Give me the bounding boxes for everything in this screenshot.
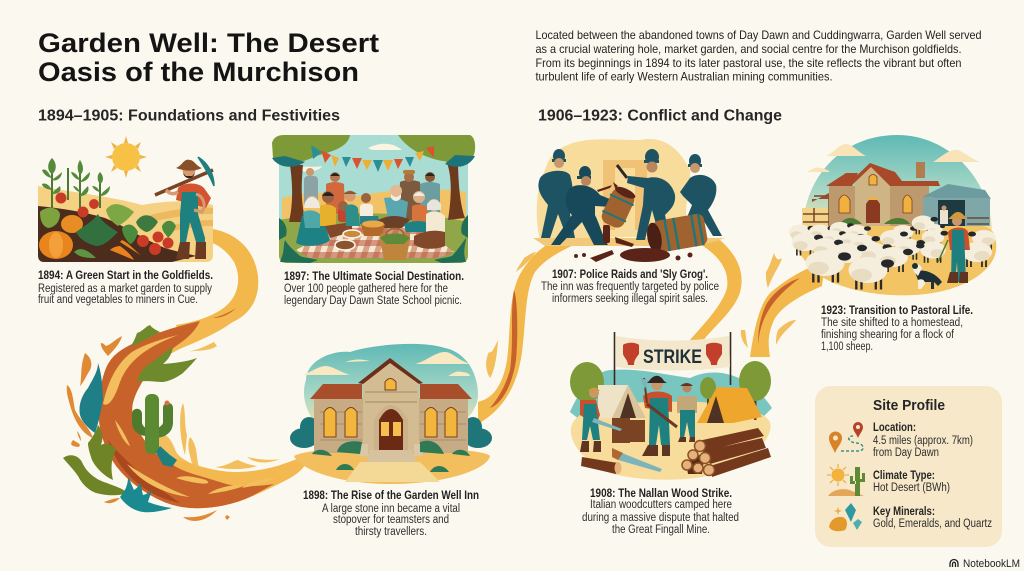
front-row figures (296, 185, 445, 249)
woodcutter right (677, 383, 697, 442)
blanket (296, 226, 454, 258)
strike banner (616, 336, 730, 370)
intro paragraph: as a crucial watering hole, market garden, and social centre for the Murchison goldfields. (536, 42, 962, 56)
swirl orange body (98, 321, 274, 508)
roof (310, 384, 472, 399)
caption: 1894: fruit and vegetables to miners in Cue. (38, 294, 198, 306)
caption: 1898: 1898: The Rise of the Garden Well Inn (303, 490, 479, 502)
title: Garden Well: The Desert (38, 28, 379, 58)
caption: 1908 (582, 488, 739, 536)
shrubs (312, 441, 470, 472)
homestead scene (789, 135, 996, 295)
river: police to strike (690, 240, 742, 342)
winding river timeline (63, 228, 825, 521)
flock of sheep (789, 216, 996, 290)
caption: 1923: The site shifted to a homestead, (821, 317, 963, 329)
logo: NotebookLM: NotebookLM (963, 558, 1020, 570)
icon: sun (105, 136, 147, 178)
caption: 1898: A large stone inn became a vital (322, 503, 460, 515)
icon: cactus (132, 394, 177, 467)
clouds (302, 352, 470, 376)
caption: 1907: The inn was frequently targeted by police (541, 281, 719, 293)
climate text: Hot Desert (BWh) (873, 482, 950, 494)
bushes (290, 428, 318, 448)
caption: 1908: during a massive dispute that halted (582, 512, 739, 524)
location text: 4.5 miles (approx. 7km) (873, 435, 973, 447)
trees (570, 361, 771, 420)
back-row figures (304, 168, 440, 220)
minerals text: Gold, Emeralds, and Quartz (873, 518, 992, 530)
caption: 1897: 1897: The Ultimate Social Destination. (284, 271, 464, 283)
officer 2 (551, 166, 612, 245)
icon: toppled barrel (645, 213, 708, 254)
trees (272, 135, 475, 222)
river: sheep to strike (750, 262, 825, 357)
panel: 1907 police raids (533, 139, 725, 305)
swirl gold band (98, 310, 305, 508)
panel: 1898 inn (290, 344, 492, 538)
river: inn to police (478, 240, 585, 424)
homestead (803, 162, 940, 226)
caption: 1907 (541, 269, 719, 305)
title (38, 28, 379, 87)
leaves: upper olive (130, 325, 197, 382)
caption: 1898: thirsty travellers. (355, 526, 427, 538)
stone walls (314, 398, 468, 453)
title: Oasis of the Murchison (38, 57, 359, 87)
spilled liquor and bottles (574, 182, 692, 262)
river splashes (741, 253, 796, 348)
sheepdog (912, 263, 942, 289)
caption: 1897 (284, 271, 464, 307)
location text: from Day Dawn (873, 447, 939, 459)
ground plants (279, 215, 468, 263)
caption: 1894: Registered as a market garden to supply (38, 283, 212, 295)
intro paragraph: Located between the abandoned towns of Day Dawn and Cuddingwarra, Garden Well served (536, 28, 982, 42)
caption: 1923 (821, 305, 973, 353)
leaves: teal bottom (120, 477, 172, 512)
panel: 1908 wood strike (570, 332, 772, 536)
icon: farmer with pickaxe (155, 157, 214, 259)
door (374, 405, 408, 452)
panel: 1897 picnic (272, 135, 475, 307)
shed (922, 184, 991, 226)
icon: fist right (706, 343, 722, 365)
location text: Location: (873, 422, 916, 434)
leaves: olive lower (63, 425, 128, 495)
poles (614, 332, 730, 385)
officer 4 (678, 154, 722, 240)
caption: 1898: stopover for teamsters and (333, 514, 449, 526)
swirl streaks (103, 335, 276, 497)
splash accents (67, 336, 230, 521)
icon: fist left (623, 343, 639, 365)
icon: map pins (829, 422, 863, 453)
raid scene (533, 139, 725, 262)
caption: 1923: 1923: Transition to Pastoral Life. (821, 305, 973, 317)
icon: gold and gems (829, 503, 862, 531)
steps (366, 450, 416, 462)
caption: 1908: Italian woodcutters camped here (590, 499, 732, 511)
intro paragraph: turbulent life of early Western Australian mining communities. (536, 70, 832, 84)
caption: 1908: the Great Fingall Mine. (612, 524, 710, 536)
strike banner: STRIKE (643, 347, 702, 368)
climate text: Climate Type: (873, 470, 935, 482)
caption: 1907: 1907: Police Raids and 'Sly Grog'. (552, 269, 708, 281)
panel: 1923 pastoral life (789, 135, 996, 353)
river swirl (63, 308, 305, 521)
caption: 1894: 1894: A Green Start in the Goldfields. (38, 270, 213, 282)
farmer (938, 212, 970, 283)
officer 1 (538, 149, 575, 238)
garden scene (38, 157, 214, 262)
icon: sun and cactus (827, 464, 865, 496)
officers (538, 149, 722, 245)
minerals text (873, 506, 992, 530)
caption: 1897: Over 100 people gathered here for the (284, 283, 448, 295)
single log and saw (581, 448, 662, 474)
officer 3 (617, 149, 675, 240)
caption: 1907: informers seeking illegal spirit sales. (552, 293, 708, 305)
picnic scene (272, 135, 475, 263)
gold hill and plumes (158, 342, 280, 469)
intro paragraph (536, 28, 982, 84)
inn scene (290, 344, 492, 484)
caption: 1894 (38, 270, 213, 306)
caption: 1923: finishing shearing for a flock of (821, 329, 955, 341)
caption: 1897: legendary Day Dawn State School picnic. (284, 295, 462, 307)
minerals text: Key Minerals: (873, 506, 935, 518)
tents (598, 385, 762, 423)
caption: 1908: 1908: The Nallan Wood Strike. (590, 488, 732, 500)
icon: flying barrel (598, 183, 639, 231)
river: garden to swirl (176, 228, 258, 340)
panel: site profile (815, 386, 1002, 547)
caption: 1898 (303, 490, 479, 538)
woodcutter centre (640, 376, 677, 456)
heading: 1894–1905: 1894–1905: Foundations and Festivities (38, 108, 340, 124)
strike scene (570, 332, 772, 480)
bunting (311, 145, 434, 172)
intro paragraph: From its beginnings in 1894 to its later pastoral use, the site reflects the vibrant but often (536, 56, 962, 70)
log pile (682, 428, 771, 477)
leaves: left teal (79, 363, 103, 433)
food and basket (335, 220, 410, 260)
panel: 1894 market garden (38, 136, 214, 306)
woodcutter left (580, 388, 622, 452)
barrels (612, 418, 645, 443)
heading: 1906–1923: 1906–1923: Conflict and Change (538, 108, 782, 124)
windows (324, 378, 457, 437)
site profile heading: Site Profile (873, 397, 945, 414)
caption: 1923: 1,100 sheep. (821, 341, 873, 353)
location text (873, 422, 973, 459)
climate text (873, 470, 950, 494)
